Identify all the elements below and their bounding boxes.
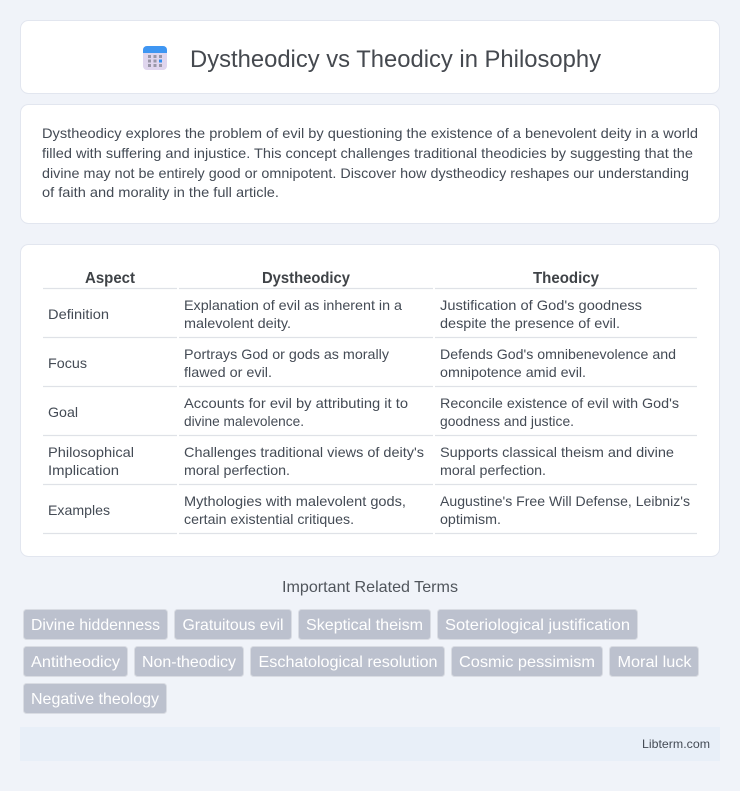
tag: non-theodicy: Non-theodicy [142,654,236,671]
row: focus: Focus [48,355,87,371]
row: philosophical implication: moral perfection. [440,462,546,478]
table header row: Dystheodicy [262,270,350,287]
panel: title header [20,20,720,94]
row: examples: certain existential critiques. [184,511,354,527]
tag: divine hiddenness: Divine hiddenness [31,617,160,634]
row: focus [48,346,676,380]
row: goal: goodness and justice. [440,413,574,429]
tag: skeptical theism: Skeptical theism [306,617,423,634]
tag: antitheodicy [24,646,128,676]
row: focus: Defends God's omnibenevolence and [440,346,676,362]
row: examples: optimism. [440,511,501,527]
tag: moral luck: Moral luck [618,654,693,671]
intro paragraph: divine may not be entirely good or omnipotent. Discover how dystheodicy reshapes our understanding [42,165,689,181]
intro paragraph: of faith and morality in the full article. [42,184,279,200]
tag: moral luck [610,646,698,676]
tag: gratuitous evil: Gratuitous evil [182,617,284,634]
row: philosophical implication: Implication [48,462,119,478]
tag: cosmic pessimism: Cosmic pessimism [459,654,595,671]
tag: divine hiddenness [24,610,168,640]
tag: eschatological resolution: Eschatological resolution [258,654,438,671]
row: philosophical implication: Philosophical [48,444,134,460]
row: examples: Augustine's Free Will Defense, Leibniz's [440,493,690,509]
row: philosophical implication: Supports classical theism and divine [440,444,674,460]
tag: negative theology: Negative theology [31,691,159,708]
title: Dystheodicy vs Theodicy in Philosophy [190,46,601,73]
intro paragraph: Dystheodicy explores the problem of evil by questioning the existence of a benevolent deity in a world [42,125,698,141]
row: examples: Examples [48,502,110,518]
tag: antitheodicy: Antitheodicy [31,654,120,671]
tag: cosmic pessimism [452,646,602,676]
row: definition: Definition [48,306,109,322]
intro paragraph [42,125,698,200]
row: philosophical implication: moral perfection. [184,462,290,478]
row: philosophical implication: Challenges traditional views of deity's [184,444,424,460]
panel: introduction [20,104,720,224]
tag: negative theology [24,684,166,714]
row: definition: Justification of God's goodness [440,297,642,313]
tag: skeptical theism [298,610,430,640]
footer bar [20,727,720,761]
row: goal: divine malevolence. [184,413,304,429]
row: goal: Reconcile existence of evil with God's [440,395,679,411]
row: focus: flawed or evil. [184,364,272,380]
row: goal [48,395,679,429]
row: definition [48,297,642,331]
table header row: Aspect [85,270,136,287]
row: examples [48,493,690,527]
panel: comparison table [20,244,720,556]
heading: important related terms: Important Related Terms [282,579,458,596]
row: definition: malevolent deity. [184,315,291,331]
icon: calendar [143,46,167,70]
row: definition: Explanation of evil as inherent in a [184,297,402,313]
tag: soteriological justification [438,610,638,640]
tag: gratuitous evil [174,610,292,640]
tag: eschatological resolution [250,646,444,676]
row: philosophical implication [48,444,674,478]
row: goal: Accounts for evil by attributing it to [184,395,408,411]
tag: soteriological justification: Soteriological justification [445,617,630,634]
row: definition: despite the presence of evil. [440,315,620,331]
tag: non-theodicy [134,646,244,676]
row: examples: Mythologies with malevolent gods, [184,493,406,509]
related term tags [24,610,698,714]
row: goal: Goal [48,404,78,420]
intro paragraph: filled with suffering and injustice. This concept challenges traditional theodicies by suggesting that the [42,145,693,161]
row: focus: Portrays God or gods as morally [184,346,389,362]
table header row [85,270,599,287]
table header row: Theodicy [533,270,599,287]
row: focus: omnipotence amid evil. [440,364,586,380]
footer credit: Libterm.com [642,737,710,751]
